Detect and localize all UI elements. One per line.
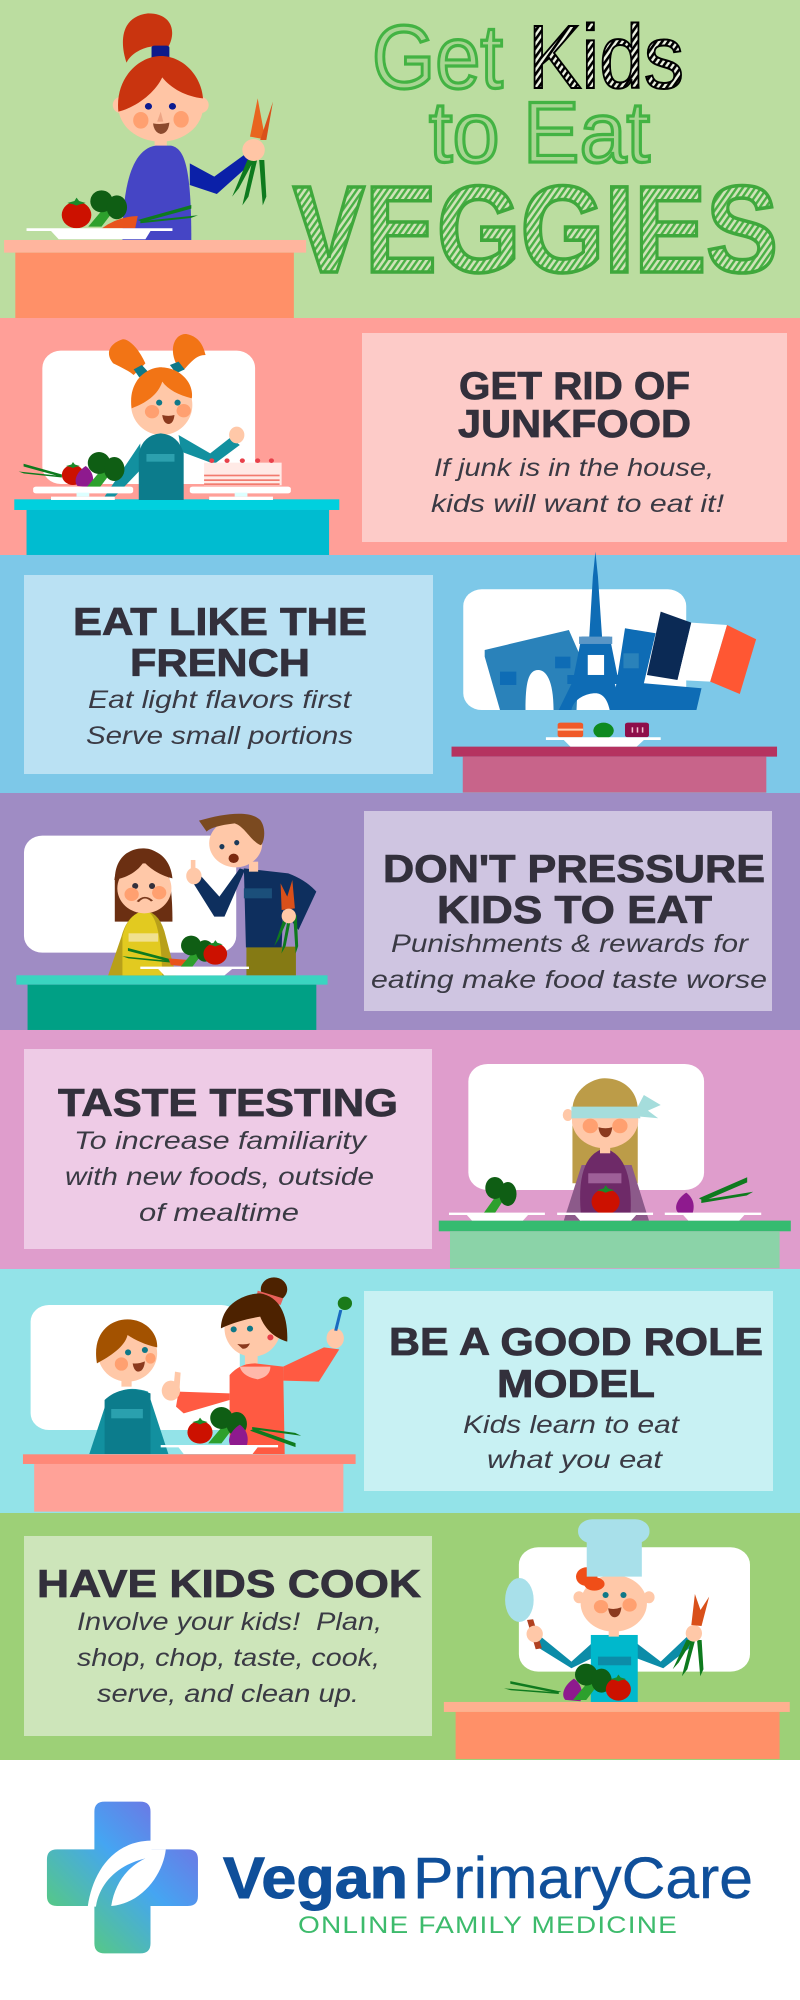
illustration: mother and son with vegetables [23,1277,356,1512]
body text: If junk is in the house, [434,454,714,482]
body text: Punishments & rewards for [391,930,750,958]
illustration: girl with vegetables and cake [14,334,339,555]
illustration: girl holding carrot at table [4,13,306,318]
text card [364,1291,773,1491]
body text: shop, chop, taste, cook, [77,1644,380,1672]
body text [77,1608,382,1708]
body text [463,1411,680,1474]
panel: have kids cook [0,1513,800,1760]
body text [431,454,724,518]
text card [24,1049,432,1249]
icon: medical cross with leaf [47,1802,198,1953]
body text: To increase familiarity [74,1127,368,1155]
logo wordmark [223,1846,753,1911]
panel: footer logo [0,1760,800,2000]
body text: Serve small portions [86,722,353,750]
title: to Eat: to Eat [429,85,650,181]
text card [24,575,433,774]
heading: BE A GOOD ROLE [389,1321,763,1364]
panel: eat like the french [0,552,800,793]
illustration: Paris landmarks and French flag [452,552,777,793]
panel: get rid of junkfood [0,318,800,555]
body text: kids will want to eat it! [431,490,724,518]
heading: JUNKFOOD [458,403,691,446]
body text: Eat light flavors first [88,686,352,714]
text card [362,333,787,542]
panel: title banner [0,0,800,318]
heading: GET RID OF [459,365,690,408]
heading: MODEL [497,1363,655,1406]
body text: with new foods, outside [65,1163,374,1191]
text card [364,811,772,1011]
panel: be a good role model [0,1269,800,1513]
heading: TASTE TESTING [58,1082,398,1125]
heading: FRENCH [130,642,310,685]
heading [389,1321,763,1406]
heading [458,365,691,446]
body text [371,930,767,994]
panel: don't pressure kids [0,793,800,1030]
illustration: father scolding sad girl [16,814,328,1030]
heading: HAVE KIDS COOK [37,1563,421,1606]
heading [73,601,367,685]
body text: what you eat [487,1446,663,1474]
body text: Involve your kids! Plan, [77,1608,382,1636]
heading: DON'T PRESSURE [383,848,765,891]
panel: taste testing [0,1030,800,1269]
body text: of mealtime [139,1199,299,1227]
body text: serve, and clean up. [97,1680,359,1708]
text card [24,1536,432,1736]
title: Kids: Kids [528,8,684,108]
heading: KIDS TO EAT [437,889,712,932]
body text [86,686,353,750]
body text [65,1127,374,1227]
heading: EAT LIKE THE [73,601,367,644]
title: Get: Get [372,8,503,108]
logo wordmark: Vegan [223,1846,408,1911]
illustration: blindfolded girl tasting vegetables [439,1064,791,1268]
illustration: child chef with spoon and carrot [444,1519,790,1759]
heading [383,848,765,932]
body text: eating make food taste worse [371,966,767,994]
logo wordmark: PrimaryCare [413,1846,753,1911]
body text: Kids learn to eat [463,1411,680,1439]
logo tagline: ONLINE FAMILY MEDICINE [298,1912,678,1939]
